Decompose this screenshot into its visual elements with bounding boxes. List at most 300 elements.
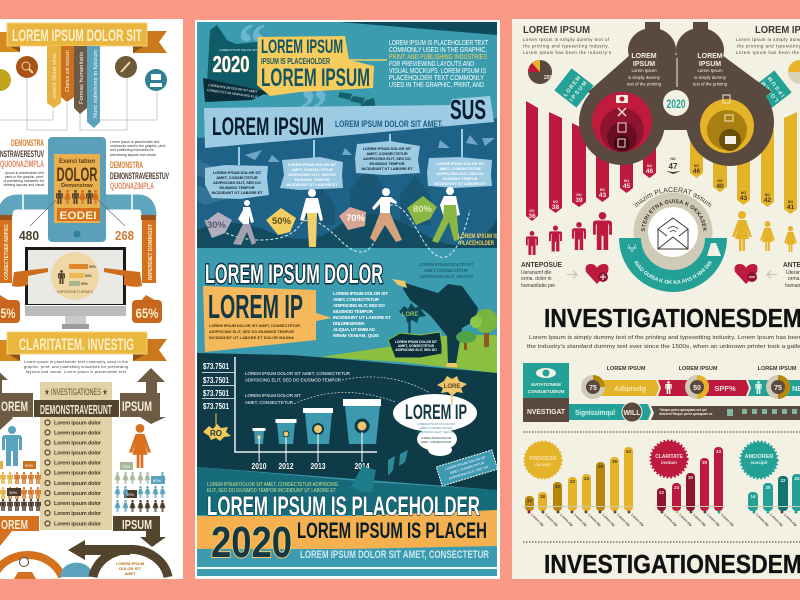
bar number labels: NO (624, 179, 629, 183)
walking figure 2 (300, 189, 323, 247)
anteposue text left: ANTEPOSUE (521, 260, 562, 269)
bar category dots and labels: Lorem dip (530, 513, 545, 527)
heading right (736, 24, 800, 55)
binocular text left: Lorem Ipsum (631, 68, 657, 73)
badge process (525, 442, 561, 478)
orange callout lorem ip: ADIPISCING ELIT, SED DO EIUSMOD TEMPOR (209, 330, 294, 334)
binocular text right: IPSUM (699, 61, 721, 68)
text blob 1: LOREM IPSUM DOLOR SIT (213, 171, 262, 175)
text blob 3: LOREM IPSUM DOLOR SIT (363, 147, 412, 151)
percent bubble 70: 70% (346, 213, 365, 223)
banner: lorem ipsum dolor sit: LOREM IPSUM DOLOR SIT (12, 26, 142, 45)
central list panel: Lorem ipsum dolor (54, 430, 102, 436)
phone panel: DOLOR (56, 165, 98, 186)
quote marks: ” (300, 79, 328, 141)
yellow lens (700, 95, 754, 153)
column labels: LOREM IPSUM (679, 366, 718, 372)
badge process: dynami (535, 462, 551, 467)
numbers 480 and 268: 480 (19, 228, 39, 243)
lore burst yellow (437, 376, 467, 405)
pipes (5, 194, 149, 216)
red bar chart: 22 (659, 490, 664, 495)
thought cloud lorem ip: LOREM IPSUM DOLOR SIT (417, 422, 455, 426)
white text column: DOLORE MAGNA (333, 321, 366, 326)
year labels: 2013 (310, 462, 326, 471)
white text column: AMET, CONSECTETUR (333, 297, 380, 302)
yellow bar chart: 20 (555, 484, 560, 489)
price list: $73.7501 (203, 362, 229, 371)
thought cloud lorem ip: AMET, CONSECTETUR (420, 426, 453, 430)
central list panel: Lorem ipsum dolor (54, 470, 102, 476)
bar category dots and labels: Lorem dip (663, 513, 678, 527)
direction arrows and labels (0, 368, 166, 430)
top right paragraph (389, 38, 488, 89)
lore starburst: LORE (402, 312, 418, 318)
red lens (592, 92, 652, 152)
intro paragraph (527, 335, 800, 350)
yellow bar chart: 18 (540, 494, 545, 499)
dark burst caption: ADIPISCING ELIT, SED DO (395, 348, 437, 352)
heart plus (586, 264, 608, 284)
bar category dots and labels: Lorem dip (706, 513, 721, 527)
badge claritate: CLARITATE (655, 454, 683, 460)
bar number labels: 46 (646, 168, 653, 175)
dark forest scene (197, 118, 497, 248)
heading left: LOREM IPSUM (523, 24, 590, 36)
walking figure 1 (233, 200, 256, 245)
yellow headline block: LOREM IPSUM (261, 37, 343, 58)
left text block: QUODNAZIMPLA (0, 159, 44, 169)
bar number labels: NO (576, 193, 582, 197)
heading left: the printing and typesetting industry. (523, 44, 609, 48)
left text block: Ipsum is placeholder text (5, 171, 44, 175)
badge claritate (651, 441, 687, 477)
bar number labels: 36 (528, 213, 536, 220)
top right paragraph: FOR PREVIEWING LAYOUTS AND (389, 59, 474, 68)
intro paragraph: the industry's standard dummy text ever since the 1500s, when an unknown printer took a galley (527, 344, 800, 350)
binocular text left: LOREM (631, 53, 657, 60)
left text block: viewing layouts and visual (4, 183, 44, 187)
yellow bar chart (523, 447, 634, 511)
teal tags: IPSUM (569, 80, 589, 103)
banner: claritatem investig (0, 332, 167, 361)
bar number labels: 42 (764, 197, 771, 204)
pie chart left: 25% (544, 75, 555, 81)
thought cloud lorem ip: LOREM IP (405, 401, 467, 424)
big 2020: 2020 (211, 518, 292, 567)
top right paragraph: PLACEHOLDER TEXT COMMONLY (389, 73, 484, 82)
connector posts (238, 129, 463, 165)
teal eye box: CONSUETUDIUM (528, 389, 565, 394)
bar number labels: NO (788, 200, 793, 204)
text blob 3: EIUSMOD TEMPOR (369, 162, 405, 166)
dark burst caption: LOREM IPSUM DOLOR SIT (395, 340, 437, 344)
percent bubble 50 (266, 208, 296, 235)
yellow headline block: LOREM IPSUM (261, 64, 370, 92)
column labels: LOREM IPSUM (758, 366, 797, 372)
teal bar chart: 24 (794, 476, 800, 481)
orange callout lorem ip: INCIDIDUNT UT LABORE ET DOLOR MAGNA (209, 336, 294, 340)
percent boxes: 65% (136, 305, 159, 321)
teal stamp: AMET, CONSECTETUR (449, 461, 485, 475)
right text block (110, 140, 169, 191)
text blob 4: EIUSMOD TEMPOR (442, 177, 478, 181)
quote marks (240, 24, 326, 107)
top right caption: LOREM IPSUM DOLOR SIT (418, 262, 474, 267)
text blob 2: ADIPISCING ELIT, SED DO (288, 173, 336, 177)
dashed route (205, 205, 470, 257)
right text block: DEMONSTRAVERESTUV (110, 171, 169, 181)
lorem and ipsum bottom labels: OREM (1, 517, 28, 532)
badge amoorer: suscipit (750, 460, 768, 465)
text blob 2: EIUSMOD TEMPOR (294, 178, 330, 182)
ro starburst: RO (210, 429, 222, 438)
intro text: Lorem ipsum is placeholder text commonly used in the (24, 360, 128, 364)
right text block: and publishing industries for (110, 148, 154, 152)
bar category dots and labels: Lorem dip (559, 513, 574, 527)
teal bar chart (746, 474, 800, 511)
bar category dots and labels: Lorem dip (601, 513, 616, 527)
bar number labels: 45 (623, 183, 630, 190)
text blob 4: AMET, CONSECTETUR (439, 167, 481, 171)
arrow row 1 (581, 375, 800, 399)
phone panel: Demonstrav (61, 183, 94, 189)
bar number labels: 39 (575, 197, 583, 204)
text blob 2 (280, 157, 343, 190)
bar number labels: 43 (599, 192, 606, 199)
2020 badge: 2020 (666, 97, 686, 111)
percent bubble 80 (407, 196, 437, 225)
teal subline: LOREM IPSUM DOLOR SIT AMET, CONSECTETUR (300, 549, 489, 561)
teal tags: IPSUM (767, 75, 786, 98)
anteposue text left: humanitatis per (521, 283, 556, 289)
yellow bar chart: 12 (527, 498, 532, 503)
chart captions with dashed lines: AMET, CONSECTETUR (245, 400, 294, 405)
left text block: NSTRAVERESTUV (0, 149, 44, 159)
central list panel: Lorem ipsum dolor (54, 522, 102, 528)
text blob 1: AMET, CONSECTETUR (216, 176, 258, 180)
corner caption: LOREM IPSUM IS (458, 234, 498, 240)
yellow bar chart: 39 (612, 459, 617, 464)
connector lines (0, 77, 157, 130)
text blob 2: INCIDIDUNT UT LABORE ET (286, 183, 338, 187)
text blob 1: INCIDIDUNT UT LABORE ET (211, 191, 263, 195)
anteposue text left: Ueranumf dte (521, 270, 552, 276)
text blob 4 (427, 157, 492, 188)
chart captions with dashed lines (245, 371, 430, 405)
big white headline: LOREM IPSUM IS PLACEHOLDER (207, 491, 480, 521)
teal bar chart: 14 (750, 494, 756, 499)
arrow row 2: Signissimqul (575, 410, 615, 417)
ro starburst (203, 413, 231, 441)
ring (634, 192, 712, 270)
orange callout lorem ip (203, 286, 332, 352)
dark burst caption: AMET, CONSECTETUR (398, 344, 435, 348)
yellow figures (732, 211, 797, 252)
binocular text left: IPSUM (633, 61, 655, 68)
central list panel: Lorem ipsum dolor (54, 501, 102, 507)
red bar chart: 30 (688, 475, 693, 480)
white text column: LOREM IPSUM DOLOR SIT (333, 291, 388, 296)
right text block: Lorem ipsum is placeholder text (110, 140, 159, 144)
bar number labels: NO (553, 200, 558, 204)
icons: circles (0, 56, 167, 91)
badge amoorer: AMOORER (745, 454, 773, 460)
orange vertical labels (0, 215, 156, 283)
text blob 3 (355, 141, 420, 175)
left people rows (0, 461, 41, 511)
price list: $73.7501 (203, 376, 229, 385)
bar number labels: 40 (716, 183, 724, 190)
panel: right infographic (512, 19, 800, 579)
red bars (526, 101, 656, 221)
column labels: LOREM IPSUM (607, 366, 646, 372)
brown box (523, 398, 569, 422)
anteposue text left: orma. dolor in (521, 276, 552, 282)
yellow bars (690, 112, 797, 214)
year labels: 2010 (252, 462, 267, 471)
text blob 3: INCIDIDUNT UT LABORE ET (361, 167, 413, 171)
top logo badge with 2020: LOREM IPSUM DOLOR SIT AMET (208, 83, 258, 94)
top right caption: ADIPISCING ELIT, SED DO (419, 274, 473, 279)
brown box: NVESTIGAT (527, 407, 565, 416)
teal bar chart: 22 (780, 478, 786, 483)
heading left: Lorem Ipsum has been the industry's (523, 50, 611, 55)
green hill (320, 335, 497, 373)
corner caption (458, 234, 498, 247)
white text column: EIUSMOD TEMPOR (333, 309, 374, 314)
percent bubble 30: 30% (207, 220, 226, 230)
small caption: LOREM IPSUM DOLOR SIT AMET, CONSECTETUR ADIPISCING (207, 482, 338, 488)
light blue title band (204, 94, 494, 148)
dark lower section (197, 353, 497, 490)
female figure (129, 424, 151, 468)
thought cloud lorem ip: ADIPISCING ELIT, SED DO (417, 430, 455, 434)
bar number labels: NO (529, 209, 535, 213)
binocular text left: text of the printing (627, 82, 662, 86)
monitor: IMPERDIETURNES (57, 289, 93, 294)
panel: middle infographic (195, 13, 500, 579)
teal stamp (436, 450, 498, 486)
yellow headline block: IPSUM IS PLACEHOLDER (261, 57, 330, 66)
tabs with rotated text (47, 46, 100, 128)
text blob 4: LOREM IPSUM DOLOR SIT (436, 162, 485, 166)
anteposue text right (783, 260, 800, 289)
bar category dots and labels: Lorem dip (630, 513, 645, 527)
chevron arrows (338, 92, 376, 106)
column labels (607, 366, 797, 372)
teal tags: LOREM (760, 80, 780, 103)
arrow row 2: WILL (623, 410, 641, 417)
top logo badge with 2020: LOREM IPSUM DOLOR SIT (219, 48, 257, 52)
heart minus (735, 264, 758, 284)
male figure (2, 426, 22, 466)
text blob 1: ADIPISCING ELIT, SED DO (213, 181, 261, 185)
2020 badge (663, 90, 689, 116)
right people rows (114, 462, 166, 512)
lower teal band (197, 467, 497, 515)
bottom arcs (0, 540, 168, 579)
teal eye box: MATATIONEM (531, 382, 561, 387)
central list panel (34, 382, 119, 530)
trees (456, 309, 498, 350)
percent bubble 50: 50% (272, 216, 291, 226)
quote marks: “ (238, 13, 266, 75)
top right paragraph: PRINT, AND PUBLISHING INDUSTRIES (389, 52, 487, 61)
teal tags: LOREM (563, 75, 582, 98)
central list panel: Lorem ipsum dolor (54, 420, 102, 426)
teal half ring: AIAD GUISA K OK KA AHS R NHI DIA (634, 261, 712, 284)
tabs with rotated text: Clarius est sonum (65, 50, 71, 92)
binocular text left (627, 53, 662, 86)
red bar chart: 24 (674, 485, 679, 490)
orange vertical labels: CONSECTETUER ADIPISC (4, 224, 10, 280)
heading left (523, 24, 611, 55)
central list panel: DEMONSTRAVERUNT (40, 402, 112, 417)
text blob 1: EIUSMOD TEMPOR (219, 186, 255, 190)
text blob 3: AMET, CONSECTETUR (366, 152, 408, 156)
walking figure 3 (370, 188, 402, 242)
bar category dots and labels: Lorem dip (573, 513, 588, 527)
bar number labels: NO (741, 191, 746, 195)
forest ground (197, 135, 497, 248)
bottom arcs: DOLOR SIT (119, 566, 141, 571)
right text block: commonly used in the graphic, print, (110, 144, 166, 148)
thought cloud lorem ip: AMET, CONSECTETUR (421, 440, 451, 444)
arrow row 1: SPF% (714, 384, 736, 393)
right people rows: 80% (153, 478, 161, 483)
bar category dots and labels: Lorem dip (544, 513, 559, 527)
dotted divider (523, 432, 800, 542)
text blob 4: INCIDIDUNT UT LABORE ET (434, 182, 486, 186)
no 47 label (666, 157, 681, 174)
top right paragraph: LOREM IPSUM IS PLACEHOLDER TEXT (389, 38, 488, 47)
top right paragraph: VISUAL MOCKUPS. LOREM IPSUM IS (389, 66, 486, 75)
thought cloud lorem ip (393, 394, 477, 456)
top logo badge with 2020: 2020 (212, 51, 250, 77)
red bar chart: 39 (702, 460, 707, 465)
right people rows: 70% (122, 464, 130, 469)
lore burst yellow: LORE (444, 384, 460, 390)
binocular text right: LOREM (697, 53, 723, 60)
top logo badge with 2020: CONSECTETUR ADIPISCING ELIT (207, 88, 258, 99)
bar category dots and labels: Lorem dip (616, 513, 631, 527)
white text column: ADIPISCING ELIT, SED DO (333, 303, 385, 308)
phone panel: Exerci tation (59, 159, 95, 165)
central list panel: Lorem ipsum dolor (54, 460, 102, 466)
lorem and ipsum bottom labels: IPSUM (122, 517, 152, 532)
yellow bar chart: 30 (598, 464, 603, 469)
monitor (25, 247, 126, 329)
thought cloud lorem ip: LOREM IPSUM DOLOR (421, 436, 451, 440)
bar number labels: NO (647, 164, 652, 168)
top right caption: AMET, CONSECTETUR (424, 268, 469, 273)
year labels: 2012 (278, 462, 294, 471)
top right caption (418, 262, 474, 279)
text blob 2: AMET, CONSECTETUR (291, 168, 333, 172)
intro text: layouts and visual. Lorem ipsum is placeholder text (26, 370, 127, 374)
small caption: ELIT, SED DO EIUSMOD TEMPOR INCIDIDUNT UT LABORE ET (207, 488, 336, 494)
chart captions with dashed lines: ADIPISCING ELIT, SED DO EIUSMOD TEMPOR (245, 378, 342, 382)
light blue title band: LOREM IPSUM (212, 113, 324, 141)
bar number labels: NO (765, 193, 770, 197)
binocular text right: is simply dummy (694, 75, 727, 80)
binoculars (579, 22, 774, 166)
lorem and ipsum bottom labels (0, 516, 166, 547)
binocular text right: Lorem Ipsum (697, 68, 723, 73)
year labels (252, 462, 370, 471)
arrow row 1: 50 (693, 385, 701, 392)
yellow headline block (257, 36, 387, 96)
heading left: Lorem Ipsum is simply dummy text of (523, 37, 610, 42)
white text column: INCIDIDUNT UT LABORE ET (333, 315, 391, 320)
small caption (207, 482, 338, 494)
dark burst caption (388, 332, 442, 358)
price list: $73.7501 (203, 402, 229, 411)
ring: STERI ETNA GUISA K OKKASEK (641, 199, 707, 232)
top right paragraph: COMMONLY USED IN THE GRAPHIC, (389, 45, 487, 54)
direction arrows and labels: OREM (1, 398, 28, 414)
light blue title band: LOREM IPSUM DOLOR SIT AMET, (335, 119, 443, 129)
percent boxes: 5% (0, 305, 16, 321)
chart captions with dashed lines: LOREM IPSUM DOLOR SIT AMET, CONSECTETUR (245, 371, 351, 376)
chart captions with dashed lines: LOREM IPSUM DOLOR SIT (245, 393, 301, 398)
bar number labels: 46 (693, 168, 700, 175)
left people rows: 90% (25, 463, 33, 468)
red bar chart (655, 447, 725, 511)
percent bubble 30 (205, 212, 232, 238)
percent boxes (0, 300, 162, 323)
phone panel: EODEI (60, 210, 96, 222)
bar number labels: NO (717, 179, 723, 183)
bar number labels: NO (694, 164, 699, 168)
text blob 2: LOREM IPSUM DOLOR SIT (288, 163, 337, 167)
panel: left infographic (0, 19, 183, 579)
red figures (526, 212, 612, 255)
bar category dots and labels: Lorem dip (587, 513, 602, 527)
central list panel: Lorem ipsum dolor (54, 491, 102, 497)
kicking figure (392, 279, 478, 367)
badge process: PROCESS (530, 456, 557, 462)
left text block: DEMONSTRA (11, 138, 44, 148)
direction arrows and labels: IPSUM (122, 398, 152, 414)
intro text: graphic, print, and publishing industries for previewing (24, 365, 128, 369)
white text column: MINIM VENIAM, QUIS (333, 333, 379, 338)
banner: claritatem investig: CLARITATEM. INVESTIG (19, 335, 134, 354)
monitor: 50% (81, 282, 89, 286)
right text block: DEMONSTRA (110, 160, 143, 170)
orange vertical labels: IMPERDIET DOMINGST (148, 224, 154, 280)
pointing hands (0, 268, 158, 302)
text blob 3: ADIPISCING ELIT, SED DO (363, 157, 411, 161)
central list panel: Lorem ipsum dolor (54, 450, 102, 456)
top logo badge with 2020 (203, 25, 268, 102)
monitor: 65% (85, 274, 93, 278)
no 47 label: 47 (669, 162, 678, 171)
bar number labels (528, 164, 794, 220)
tabs with rotated text: Formas humanitatis (79, 52, 85, 104)
arrow row 2 (569, 402, 800, 422)
orange callout lorem ip: LOREM IPSUM DOLOR SIT AMET, CONSECTETUR (209, 324, 300, 328)
arrows (567, 270, 777, 278)
intro text (24, 360, 128, 374)
banner: lorem ipsum dolor sit (0, 23, 167, 53)
teal bar chart: 20 (765, 485, 771, 490)
no 47 label: NO (670, 157, 676, 161)
badge amoorer (741, 442, 777, 478)
arrow row 2: "Neque porro quisquam est qui (659, 408, 707, 412)
central list panel: Lorem ipsum dolor (54, 511, 102, 517)
